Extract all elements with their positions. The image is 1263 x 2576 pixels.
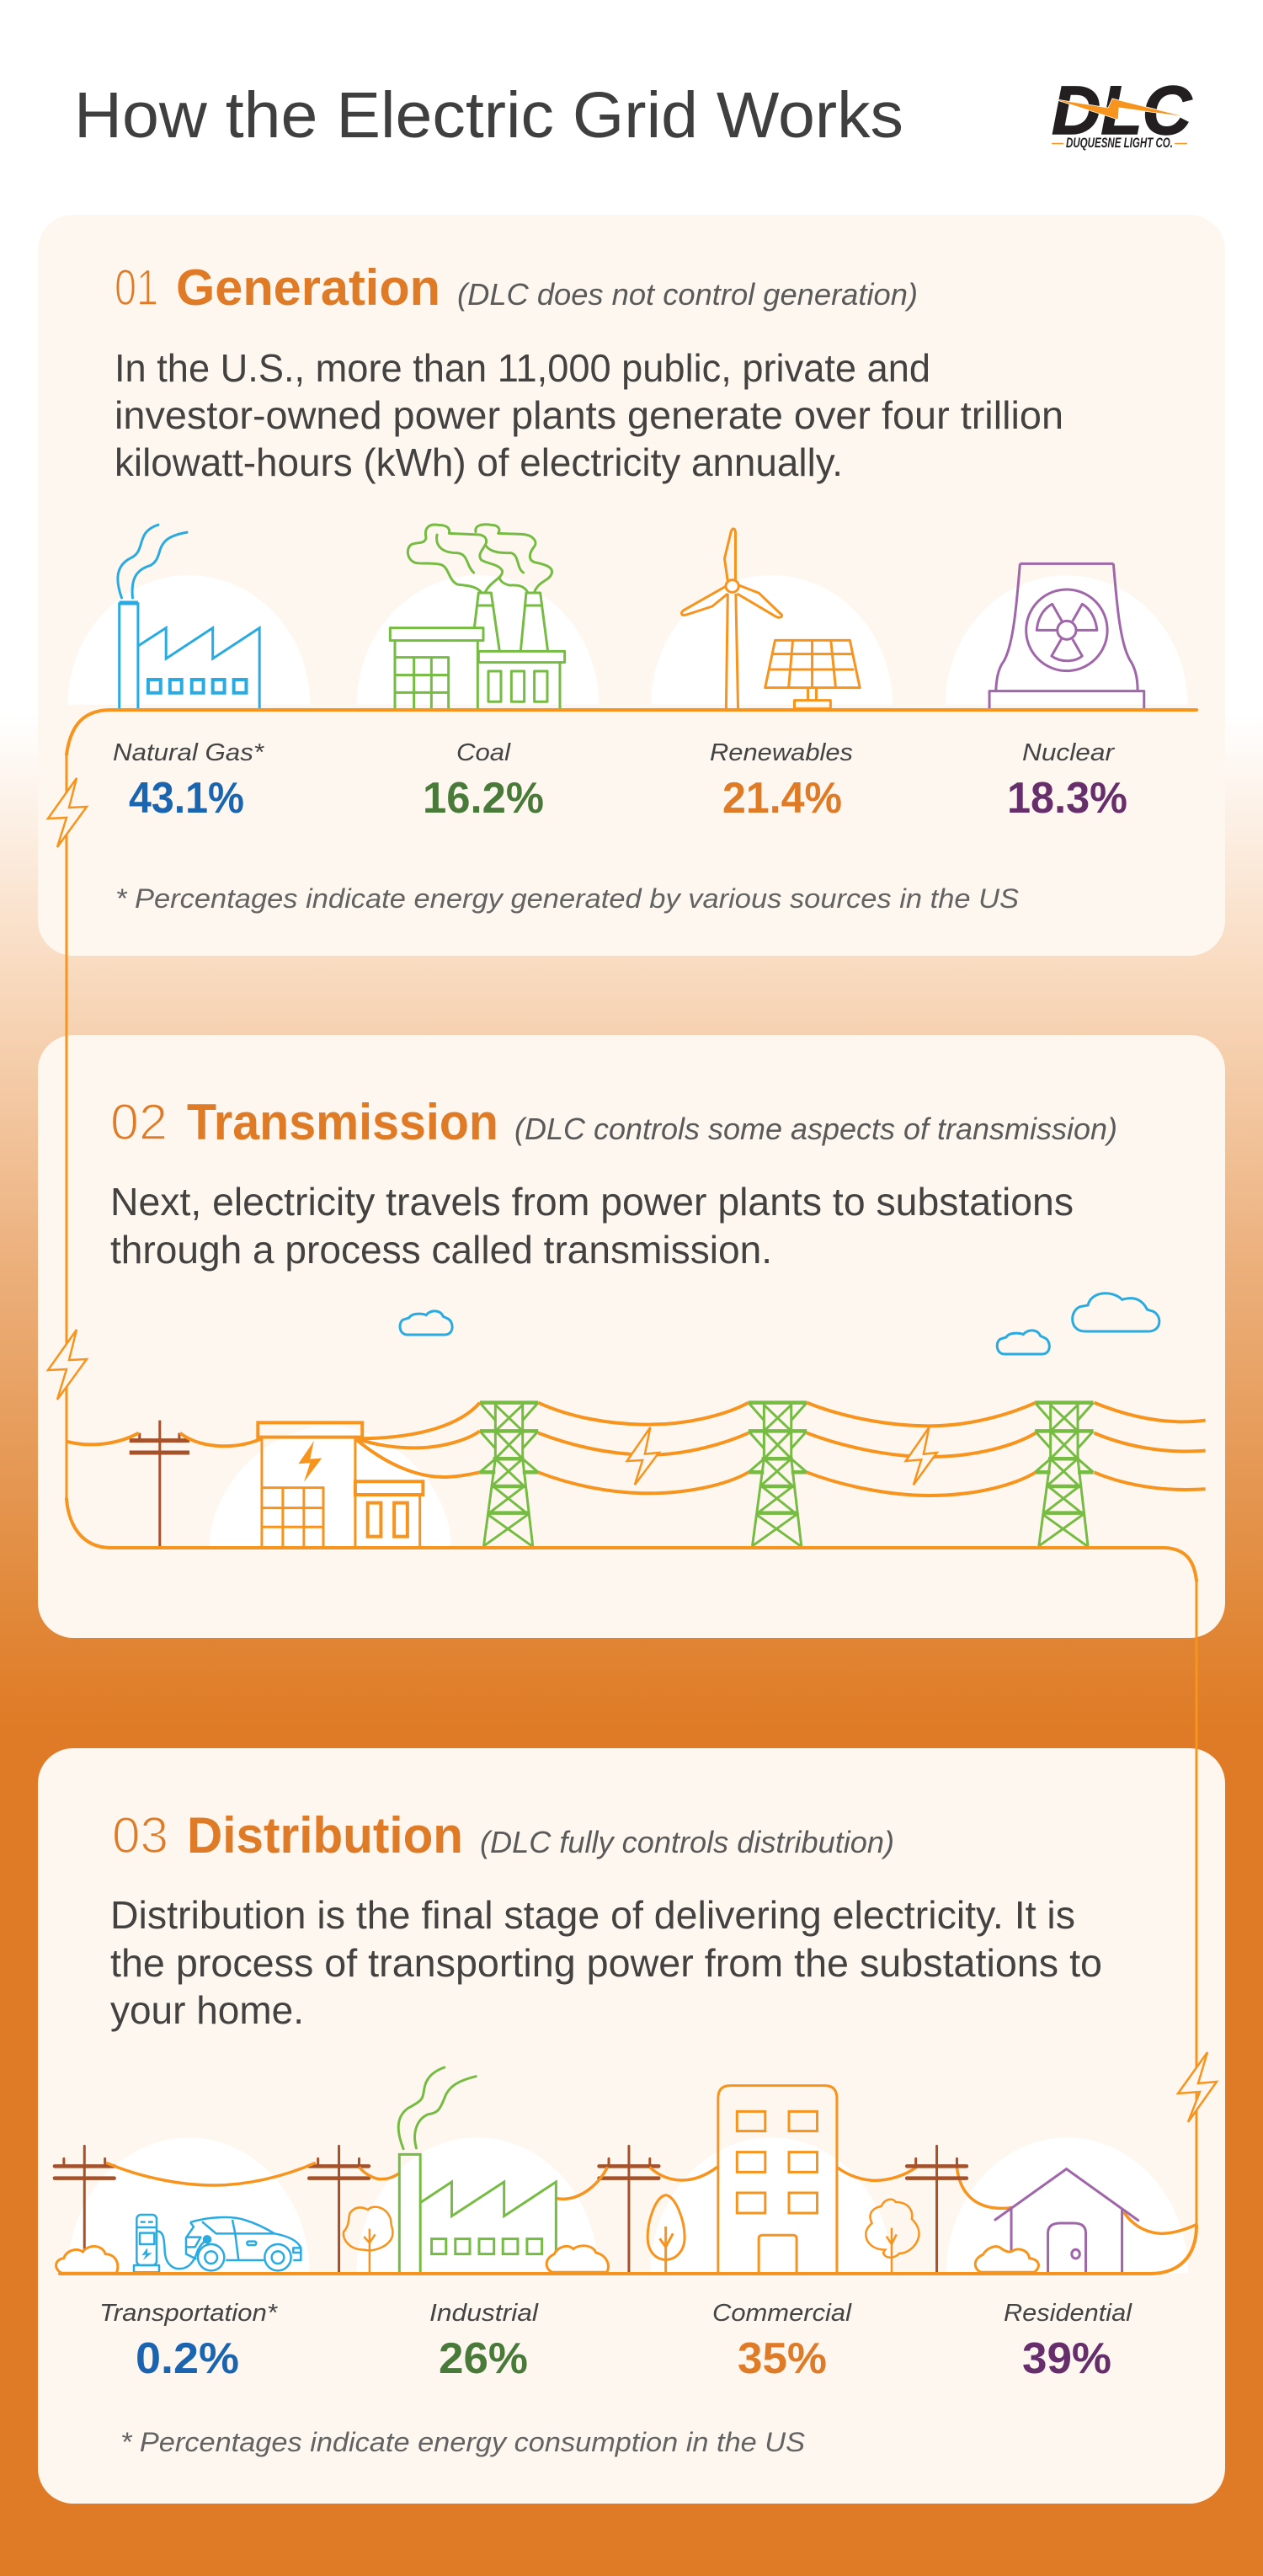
icon: round tree xyxy=(866,2200,919,2272)
icon: natural gas plant xyxy=(118,525,259,710)
panel: generation xyxy=(38,215,1225,956)
power wires xyxy=(650,2167,1196,2233)
heading: 02 Transmission: 02 xyxy=(110,1094,168,1150)
stat: transportation xyxy=(99,2300,279,2383)
stat: transportation: 0.2% xyxy=(136,2334,239,2383)
heading: 03 Distribution: 03 xyxy=(112,1807,168,1864)
stat: natural gas: Natural Gas* xyxy=(113,739,265,766)
heading: 02 Transmission xyxy=(110,1094,1117,1150)
icon: substation xyxy=(210,1422,451,1547)
stat: industrial: 26% xyxy=(439,2334,528,2383)
heading: 01 Generation: (DLC does not control generation) xyxy=(457,277,918,312)
logo: DLC Duquesne Light Co.: DUQUESNE LIGHT CO. xyxy=(1066,135,1173,151)
stat: residential xyxy=(1004,2300,1133,2383)
stat: coal xyxy=(423,739,544,823)
footnote: distribution: * Percentages indicate energy consumption in the US xyxy=(120,2427,805,2457)
icon: industrial factory xyxy=(398,2067,556,2273)
icon: bushes xyxy=(56,2246,608,2273)
illustration: transmission line xyxy=(67,1293,1206,1547)
heading: 02 Transmission: (DLC controls some aspects of transmission) xyxy=(514,1112,1117,1146)
consumption labels and percentages xyxy=(99,2300,1133,2383)
icon: coal plant xyxy=(390,525,565,709)
connecting power line xyxy=(60,710,1196,2274)
heading: 02 Transmission: Transmission xyxy=(187,1094,498,1150)
icon: utility pole xyxy=(130,1421,189,1547)
stat: industrial xyxy=(429,2300,540,2383)
icon: house xyxy=(995,2169,1138,2272)
stat: commercial: 35% xyxy=(738,2334,827,2383)
power wires xyxy=(106,2163,608,2199)
source labels and percentages xyxy=(113,739,1127,823)
illustration: distribution left half xyxy=(55,2067,658,2273)
stat: coal: 16.2% xyxy=(423,774,544,823)
icon: nuclear cooling tower xyxy=(989,563,1144,709)
text block: distribution intro: your home. xyxy=(110,1988,304,2032)
stat: coal: Coal xyxy=(456,739,512,766)
heading: 01 Generation: Generation xyxy=(176,259,440,316)
stat: nuclear: 18.3% xyxy=(1007,774,1127,823)
heading: 01 Generation: 01 xyxy=(115,259,158,316)
heading: 03 Distribution: (DLC fully controls distribution) xyxy=(480,1825,894,1859)
illustration: generation backdrops xyxy=(68,575,1187,705)
heading: 01 Generation xyxy=(115,259,918,316)
icon: wind turbine and solar panel xyxy=(681,529,860,709)
stat: industrial: Industrial xyxy=(429,2300,540,2327)
stat: nuclear: Nuclear xyxy=(1022,739,1115,766)
stat: commercial: Commercial xyxy=(712,2300,853,2327)
text block: distribution intro: Distribution is the final stage of delivering electricity. It is xyxy=(110,1893,1075,1937)
stat: renewables: 21.4% xyxy=(722,774,842,823)
footnote: generation: * Percentages indicate energy generated by various sources in the US xyxy=(115,883,1019,914)
stat: commercial xyxy=(712,2300,853,2383)
icon: transmission towers xyxy=(480,1403,1094,1546)
title: How the Electric Grid Works xyxy=(74,79,903,152)
stat: renewables xyxy=(710,739,853,823)
stat: natural gas: 43.1% xyxy=(129,774,244,823)
stat: residential: 39% xyxy=(1022,2334,1111,2383)
text block: distribution intro: the process of transporting power from the substations to xyxy=(110,1941,1102,1985)
logo: DLC Duquesne Light Co.: DLC xyxy=(1052,72,1193,149)
stat: transportation: Transportation* xyxy=(99,2300,279,2327)
text block: generation intro: investor-owned power plants generate over four trillion xyxy=(115,393,1063,437)
icon: utility pole xyxy=(907,2146,967,2273)
icon: tree xyxy=(344,2207,392,2272)
stat: residential: Residential xyxy=(1004,2300,1133,2327)
text block: generation intro: In the U.S., more than 11,000 public, private and xyxy=(115,346,930,390)
icon: clouds xyxy=(400,1293,1159,1354)
heading: 03 Distribution xyxy=(112,1807,894,1864)
panel: distribution xyxy=(38,1748,1225,2504)
text block: transmission intro: Next, electricity travels from power plants to substations xyxy=(110,1180,1074,1224)
icon: EV charger and car xyxy=(134,2215,301,2272)
text block: generation intro: kilowatt-hours (kWh) of electricity annually. xyxy=(115,440,843,484)
icon: lightning bolts on main line xyxy=(48,778,1217,2122)
icon: bush xyxy=(975,2247,1038,2272)
stat: renewables: Renewables xyxy=(710,739,853,766)
icon: utility poles xyxy=(55,2146,658,2273)
heading: 03 Distribution: Distribution xyxy=(187,1807,463,1864)
panel: transmission xyxy=(38,1035,1225,1638)
stat: nuclear xyxy=(1007,739,1127,823)
stat: natural gas xyxy=(113,739,265,823)
icon: tall tree xyxy=(647,2195,685,2272)
icon: lightning bolts on wires xyxy=(627,1427,937,1485)
text block: distribution intro xyxy=(110,1893,1102,2032)
icon: commercial building xyxy=(718,2086,837,2272)
text block: generation intro xyxy=(115,346,1063,484)
power wires xyxy=(67,1403,1206,1496)
illustration: distribution right half xyxy=(647,2086,1196,2273)
text block: transmission intro: through a process called transmission. xyxy=(110,1228,772,1272)
text block: transmission intro xyxy=(110,1180,1074,1272)
